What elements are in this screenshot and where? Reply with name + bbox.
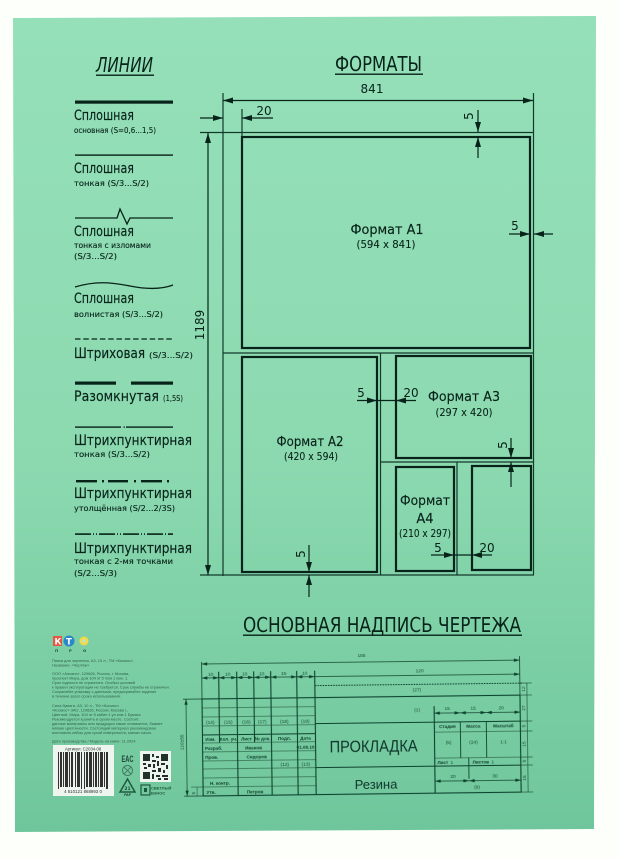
dimension: 5 under A2: 5	[294, 550, 308, 558]
right-hand cells text: 15	[470, 706, 476, 712]
icon: recycling triangle	[120, 779, 135, 797]
product information text: Дата производства / Модель на книге: 11.2024	[52, 738, 136, 744]
product information text: Срок годности не ограничен. Особых условий	[52, 680, 135, 685]
icon: QR code	[140, 751, 171, 782]
dimension: 5 under A3	[496, 438, 511, 487]
thin sheet outlines	[200, 93, 534, 576]
line type: open: (1,5S)	[163, 394, 183, 403]
logo	[53, 636, 88, 653]
logo: Р	[69, 648, 72, 653]
right-hand cells text: 20	[450, 774, 456, 780]
dimension: 5 right margin: 5	[511, 219, 519, 233]
line type: solid wavy: Сплошная	[74, 291, 134, 307]
dimension: 841: 841	[361, 82, 383, 96]
table headers and names: Кол. уч.	[220, 737, 237, 742]
dimension: 5 top margin: 5	[462, 112, 476, 120]
barcode label: Артикул: С2034-08	[65, 746, 102, 752]
logo: Т	[66, 638, 72, 648]
format A2 frame	[242, 357, 377, 572]
dimensions: left side height	[179, 699, 203, 796]
right-hand cells text: 1:1	[500, 739, 507, 745]
drawing name: ПРОКЛАДКА	[329, 736, 418, 756]
dimension: 5 and 20 between A2 and A3: 5	[357, 386, 365, 400]
right-hand cells text: 1	[491, 759, 494, 765]
line type: open: Разомкнутая	[74, 389, 159, 405]
table headers and names: Разраб.	[205, 745, 222, 751]
line type: solid wavy: волнистая (S/3...S/2)	[74, 310, 163, 319]
logo: К	[54, 638, 62, 648]
format A2 frame: (420 x 594)	[284, 451, 338, 463]
dimensions: right side heights	[520, 683, 533, 792]
right-hand cells text: (9)	[474, 785, 480, 791]
icon: recycling triangle: 21	[124, 786, 131, 792]
format A3 frame: Формат А3	[428, 390, 500, 405]
column reference numbers: (16)	[242, 719, 251, 726]
dimensions: columns: 10	[259, 671, 265, 677]
barcode label	[53, 745, 114, 796]
dimension: 1189: 1189	[193, 310, 207, 340]
line type: solid thin with breaks	[74, 209, 173, 261]
dimensions: right side heights: 27	[521, 705, 527, 711]
dimensions: columns	[202, 671, 315, 678]
right-hand cells text: Стадия	[439, 724, 456, 729]
dimensions: right side heights: 15	[522, 741, 528, 747]
product information text: данные материалы или продукция также отливается, бывает	[52, 721, 163, 726]
column reference numbers: (19)	[301, 719, 310, 725]
table headers and names: Пров.	[205, 755, 218, 760]
line type: dash-dot thin: тонкая (S/3...S/2)	[74, 450, 150, 459]
right-hand cells text: 1	[450, 760, 454, 766]
dimensions: columns: 10	[225, 672, 231, 678]
line type: solid wavy	[74, 283, 173, 319]
line type: solid thin with breaks: тонкая с изломами	[74, 241, 151, 250]
dimensions: right side heights: 5	[522, 759, 528, 762]
format A1 frame	[242, 137, 530, 348]
line type: solid thin: Сплошная	[74, 161, 134, 177]
product information text: мягкие цветочности. Состоящий материал рекомендован	[52, 726, 156, 730]
dimensions: overall widths 185 and 120: 120	[416, 668, 424, 674]
line type: dash-two-dots thin: тонкая с 2-мя точками	[74, 557, 173, 566]
product information text: изготовить кейсы для сухой поверхности, мягких касок.	[52, 730, 152, 735]
table headers and names: Сидоров	[247, 754, 267, 759]
table headers and names: № док.	[255, 736, 270, 741]
product information text: ООО «Альянс», 129626, Россия, г. Москва,	[52, 671, 129, 676]
logo: П	[55, 648, 58, 653]
table headers and names: Петров	[247, 789, 264, 794]
right-hand cells text: 30	[492, 773, 498, 779]
column reference numbers: (18)	[280, 719, 289, 725]
dimension: 20 left margin	[200, 104, 273, 118]
heading: formats: ФОРМАТЫ	[335, 52, 422, 76]
format A1 frame: Формат А1	[350, 223, 424, 238]
table headers and names: (13)	[302, 762, 311, 768]
dimensions: columns: 10	[302, 671, 308, 677]
format A3 frame	[396, 356, 531, 458]
icon: not for food	[122, 766, 132, 776]
line type: solid main: основная (S=0,6...1,5)	[74, 126, 156, 135]
dimension: 5 and 20 between A4 sheets	[431, 541, 495, 555]
table headers and names: Дата	[300, 736, 311, 741]
icon: green mark logo: СВЕТЛЫЙ	[151, 786, 172, 790]
product information text: «Космос» ЗАО, 129626, Россия, Москва г.,	[52, 708, 128, 712]
line type: solid thin	[74, 154, 173, 188]
panel: title block drawing	[178, 651, 533, 796]
dimension: 5 and 20 between A2 and A3: 20	[403, 386, 419, 400]
column reference numbers: (17)	[258, 719, 267, 725]
format A1 frame: (594 x 841)	[356, 239, 416, 251]
product information text: Рекомендуется хранить в сухом месте. Состоит:	[52, 716, 140, 722]
dimension: 5 and 20 between A2 and A3	[357, 386, 419, 400]
product information text: Цветной, Мира, 104 эт 5 кабин 1 ул ком 1 Бумага	[52, 712, 141, 717]
dimensions: columns: 10	[208, 672, 214, 678]
dimensions: right side heights: 5	[521, 724, 527, 727]
table headers and names: Н. контр.	[210, 781, 230, 786]
dimensions: columns: 10	[242, 671, 248, 678]
table headers and names: Утв.	[207, 790, 216, 795]
line type: solid main	[74, 100, 173, 135]
logo: О	[83, 648, 87, 653]
line type: dash-two-dots thin: (S/2...S/3)	[74, 569, 117, 578]
heading: lines: ЛИНИИ	[95, 53, 153, 77]
column reference numbers	[206, 719, 310, 726]
right-hand cells text: Лист	[437, 760, 449, 765]
format A2 frame: Формат А2	[276, 435, 344, 450]
product information text: Сила бумаги, А3, 10 л., ТМ «Космос»	[52, 703, 119, 708]
dimensions: overall widths 185 and 120	[201, 651, 520, 678]
line type: dashed: (S/3...S/2)	[149, 351, 193, 360]
dimension: 5 top margin	[462, 110, 478, 158]
right-hand cells text	[413, 686, 521, 791]
dimensions: columns: 15	[281, 671, 287, 677]
heading: title block: ОСНОВНАЯ НАДПИСЬ ЧЕРТЕЖА	[243, 613, 521, 637]
right-hand cells text: (1)	[414, 707, 421, 713]
line type: dashed: Штриховая	[74, 346, 145, 362]
product information text: в течение всего срока использования.	[52, 694, 121, 698]
line type: solid thin with breaks: Сплошная	[74, 224, 134, 240]
line type: solid thin: тонкая (S/3...S/2)	[74, 179, 149, 188]
format A4 frame: (210 x 297)	[399, 528, 451, 540]
line type: open	[74, 382, 183, 405]
dimension: 5 under A2	[294, 545, 309, 597]
second A4 frame	[472, 466, 531, 570]
format A4 frame: А4	[416, 512, 434, 527]
dimensions: right side heights: 12	[521, 686, 527, 692]
dimension: 5 and 20 between A4 sheets: 5	[434, 541, 442, 555]
table headers and names: Подп.	[278, 736, 291, 741]
barcode label: 4 610121 868993 0	[64, 789, 102, 794]
line type: dash-dot thick: утолщённая (S/2...2/3S)	[74, 504, 175, 513]
product information text	[52, 658, 170, 744]
table headers and names: 01.06.10	[297, 745, 315, 750]
title block grid	[202, 656, 523, 796]
dimension: 5 and 20 between A4 sheets: 20	[479, 541, 495, 555]
format A4 frame: Формат	[400, 494, 450, 509]
right-hand cells text: Масштаб	[493, 722, 514, 728]
dimensions: left side height: 110±55	[179, 734, 186, 750]
dimension: 5 under A3: 5	[496, 441, 510, 449]
icon: recycling triangle: PAP	[124, 793, 132, 797]
column reference numbers: (14)	[206, 720, 215, 726]
format A3 frame: (297 x 420)	[436, 407, 492, 419]
dimensions: right side heights: 15	[522, 775, 528, 781]
line type: dash-dot thin	[74, 426, 192, 459]
table headers and names: Изм.	[205, 737, 216, 742]
product information text: Название: «Чертёж»	[52, 662, 89, 668]
line type: dash-dot thick: Штрихпунктирная	[74, 486, 192, 502]
table headers and names: Лист	[241, 736, 253, 742]
product information text: к правил эксплуатации не требуется. Срок службы не ограничен.	[52, 684, 170, 690]
product information text: проспект Мира, дом 104 эт 5 пом 1 ком. 1.	[52, 676, 128, 680]
icon: green mark logo	[141, 785, 172, 796]
panel: line types	[74, 100, 193, 578]
icon: EAC mark: EAC	[122, 754, 134, 764]
dimension: 5 right margin	[509, 219, 553, 234]
table headers and names: (12)	[281, 762, 290, 768]
right-hand cells text: 15	[444, 706, 450, 712]
product information text: Папка для черчения, А3, 10 л., ТМ «Космос»	[52, 658, 133, 663]
dimension: 20 left margin: 20	[256, 104, 272, 118]
dimensions: overall widths 185 and 120: 185	[357, 653, 366, 659]
line type: solid main: Сплошная	[74, 108, 134, 124]
line type: solid thin with breaks: (S/3...S/2)	[74, 252, 117, 261]
right-hand cells text: (5)	[446, 740, 452, 746]
line type: dash-dot thick	[74, 480, 192, 513]
dimensions: left side height: 5	[191, 791, 197, 794]
right-hand cells text: (27)	[413, 687, 422, 693]
product information text: Сохраняйте упаковку с данными, предохраняйте изделие	[52, 689, 156, 694]
line type: dash-dot thin: Штрихпунктирная	[74, 433, 192, 449]
right-hand cells text: 20	[498, 705, 504, 711]
panel: paper formats drawing	[193, 82, 553, 597]
table headers and names	[205, 736, 316, 795]
line type: dash-two-dots thin	[74, 533, 192, 578]
material name: Резина	[355, 777, 398, 792]
line type: dash-two-dots thin: Штрихпунктирная	[74, 541, 192, 557]
right-hand cells text: Масса	[466, 724, 481, 729]
column reference numbers: (15)	[224, 720, 233, 726]
format A4 frame	[396, 467, 454, 571]
right-hand cells text: Листов	[473, 759, 489, 765]
icon: green mark logo: ВЗНОС	[151, 790, 165, 796]
table headers and names: Иванов	[245, 745, 262, 750]
line type: dashed	[74, 339, 193, 362]
right-hand cells text: (24)	[469, 740, 478, 746]
